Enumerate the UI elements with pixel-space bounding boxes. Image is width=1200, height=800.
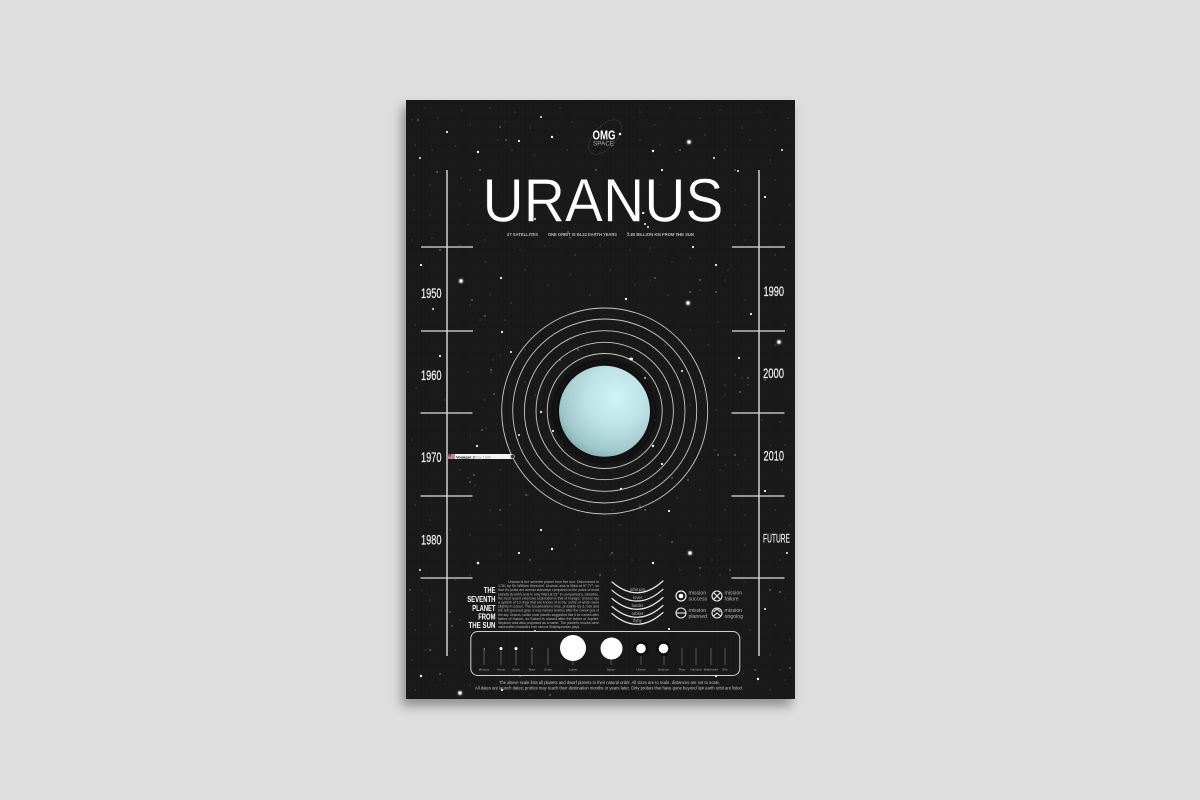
footnotes: All dates are launch dates; probes may reach their destination months or years later. Only probes that have gone beyond low earth orbit are listed. xyxy=(475,686,743,690)
legend labels: mission xyxy=(688,608,706,614)
heading: the seventh planet from the sun xyxy=(467,585,496,630)
heading: the seventh planet from the sun: PLANET xyxy=(472,603,496,613)
solar system scale panel: Ceres xyxy=(544,668,552,672)
mission type arcs: rover xyxy=(633,595,643,600)
heading: the seventh planet from the sun: THE SUN xyxy=(468,620,496,630)
icon: mission success xyxy=(676,591,686,601)
heading: the seventh planet from the sun: THE xyxy=(484,585,496,595)
description text block: the sky. Uranus, unlike most planets suggested that it be named after xyxy=(498,613,600,617)
solar system scale panel: Mars xyxy=(529,668,536,672)
mission: Voyager 2 xyxy=(448,454,514,459)
timeline: left xyxy=(420,170,473,656)
description text block: the rest gaseous gray. It was named Uranus after the Greek god of xyxy=(498,609,600,613)
planet Uranus xyxy=(554,361,654,461)
legend labels: mission xyxy=(724,608,742,614)
icon: mission planned xyxy=(676,608,686,618)
solar system scale panel: Jupiter xyxy=(569,668,577,672)
mission: Voyager 2: Voyager 2 xyxy=(456,454,476,459)
year labels: 1950 xyxy=(421,285,442,301)
legend labels: ongoing xyxy=(724,614,743,620)
legend labels: success xyxy=(688,596,708,602)
legend labels: mission xyxy=(688,590,706,596)
description text block: Uranus is the seventh planet from the sun. Discovered in xyxy=(508,580,599,584)
year labels: 1980 xyxy=(421,532,442,548)
footnotes xyxy=(475,680,743,690)
year labels: 1990 xyxy=(764,283,784,299)
year labels: 1960 xyxy=(421,367,442,383)
solar system scale panel: Neptune xyxy=(658,668,669,672)
subtitle facts xyxy=(507,232,695,237)
legend labels: failure xyxy=(724,596,739,602)
description text block: the most recent extensive exploration is that of Voyager. Uranus has xyxy=(498,596,599,600)
year labels: FUTURE xyxy=(763,532,790,546)
solar system scale panel: Eris xyxy=(723,668,728,672)
description text block xyxy=(498,580,600,629)
legend xyxy=(676,590,743,620)
description text block: father of Saturn, so Saturn is named after the father of Jupiter. xyxy=(498,617,599,621)
logo: OMG Space: OMG xyxy=(592,128,616,142)
logo: OMG Space xyxy=(583,114,627,160)
solar system scale panel: Makemake xyxy=(704,668,718,672)
solar system scale panel: Saturn xyxy=(607,668,616,672)
icon: mission ongoing xyxy=(712,608,722,618)
description text block: a system of 13 rings that are known of so far, some of which were xyxy=(498,600,599,604)
mission type arcs: flyby xyxy=(633,618,643,623)
footnotes: The above scale lists all planets and dwarf planets in their natural order. All sizes are to scale, distances are not to scale. xyxy=(499,680,720,685)
legend labels: planned xyxy=(688,614,707,620)
subtitle facts: 2.80 BILLION KM FROM THE SUN xyxy=(627,232,695,237)
year labels xyxy=(421,283,790,548)
solar system scale panel: Pluto xyxy=(679,668,686,672)
description text block: that it's poles are almost sideways compared to the poles of most xyxy=(498,588,600,592)
mission type arcs xyxy=(612,581,663,624)
title: URANUS xyxy=(482,166,724,234)
legend labels: mission xyxy=(724,590,742,596)
heading: the seventh planet from the sun: SEVENTH xyxy=(467,594,496,604)
description text block: named after characters from various Shakespearean plays. xyxy=(498,625,580,629)
icon: mission failure xyxy=(712,591,722,601)
rings xyxy=(502,308,708,514)
description text block: slightly in colour. The icosahedral is blue, probably icy & rock and xyxy=(498,605,599,609)
mission type arcs: lander xyxy=(632,603,644,608)
year labels: 2000 xyxy=(763,365,784,381)
logo: OMG Space: SPACE xyxy=(593,140,615,148)
poster background xyxy=(406,100,795,699)
timeline: right xyxy=(732,170,785,656)
legend labels xyxy=(688,590,743,620)
heading: the seventh planet from the sun: FROM xyxy=(478,612,496,622)
solar system scale panel: Mercury xyxy=(479,668,490,672)
year labels: 2010 xyxy=(764,448,784,464)
subtitle facts: ONE ORBIT IS 84.32 EARTH YEARS xyxy=(548,232,617,237)
solar system scale panel: Uranus xyxy=(636,668,646,672)
description text block: 1781 by Sir William Herschel. Uranus' axis is tilted at 97.77°, so xyxy=(498,584,599,588)
mission type arcs: orbit.pro xyxy=(630,587,646,592)
solar system scale panel: Venus xyxy=(497,668,506,672)
star field xyxy=(410,108,790,696)
solar system scale panel: Haumea xyxy=(691,668,702,672)
mission: Voyager 2: Flyby 1986 xyxy=(473,455,491,459)
description text block: planets (Earth's axis is only tilted at 23° in comparison). Likewise, xyxy=(498,592,599,596)
description text block: Neptune was also proposed as a name. The planet's moons were xyxy=(498,621,599,625)
subtitle facts: 27 SATELLITES xyxy=(507,232,538,237)
year labels: 1970 xyxy=(421,449,442,465)
solar system scale panel: Earth xyxy=(513,668,520,672)
solar system scale panel xyxy=(471,632,740,676)
mission type arcs: orbiter xyxy=(632,611,644,616)
